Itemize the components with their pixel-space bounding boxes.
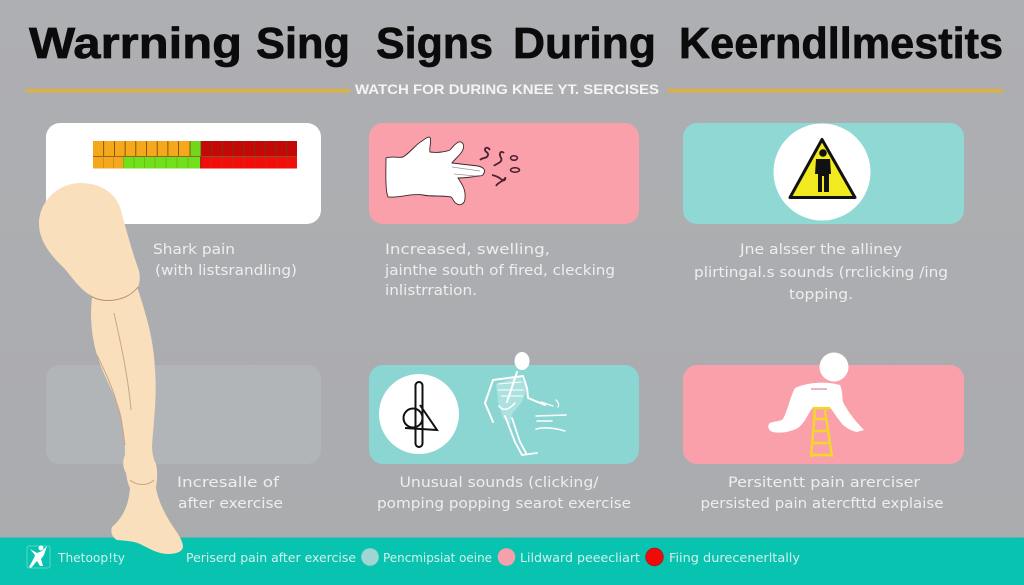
title: Sing — [256, 19, 350, 68]
panel: swelling — [369, 123, 639, 299]
text: swelling: inlistrration. — [385, 283, 477, 299]
icon: stool — [811, 407, 832, 457]
legend labels — [57, 550, 801, 565]
text: warning sign: topping. — [789, 287, 853, 303]
panel: sharp pain — [46, 123, 321, 279]
text: persistent pain: persisted pain atercfttd explaise — [700, 496, 944, 512]
panel: warning sign — [683, 123, 964, 303]
text: sharp pain — [153, 242, 297, 279]
icon: tuning symbol — [379, 374, 459, 454]
icon: person on stool — [768, 352, 864, 433]
text: warning sign — [694, 242, 948, 303]
title: Keerndllmestits — [679, 19, 1003, 68]
footer band — [0, 538, 1024, 585]
legend labels: Thetoop!ty — [57, 550, 126, 565]
text: sharp pain: Shark pain — [153, 242, 235, 258]
title: Warrning — [29, 19, 242, 68]
subtitle with rules: WATCH FOR DURING KNEE YT. SERCISES — [355, 81, 659, 97]
text: increase after exercise — [177, 475, 283, 512]
icon: warning triangle — [774, 124, 870, 220]
icon: swollen hand — [386, 137, 520, 205]
text: swelling: Increased, swelling, — [385, 242, 550, 258]
text: sharp pain: (with listsrandling) — [155, 263, 297, 279]
subtitle with rules — [26, 81, 1003, 97]
legend labels: Fiing durecenerltally — [669, 550, 801, 565]
text: swelling: jainthe south of fired, clecking — [384, 263, 615, 279]
pain scale gauge — [93, 141, 297, 168]
text: persistent pain — [700, 475, 944, 512]
text: persistent pain: Persitentt pain arerciser — [728, 475, 920, 491]
panel: persistent pain — [683, 352, 964, 512]
text: unusual sounds — [377, 475, 631, 512]
panel: swelling after exercise — [46, 365, 321, 512]
panel: unusual sounds — [369, 352, 639, 512]
text: increase after exercise: Incresalle of — [177, 475, 280, 491]
title: During — [513, 19, 656, 68]
illustration: leg — [39, 183, 183, 554]
legend dots — [361, 548, 663, 566]
title: Signs — [376, 19, 493, 68]
title — [29, 19, 1003, 68]
text: unusual sounds: Unusual sounds (clicking/ — [400, 475, 599, 491]
legend labels: Pencmipsiat oeine — [383, 550, 492, 565]
icon: therapy figure — [27, 546, 50, 568]
legend labels: Periserd pain after exercise — [186, 550, 356, 565]
legend labels: Lildward peeecliart — [520, 550, 640, 565]
text: warning sign: Jne alsser the alliney — [739, 242, 902, 258]
text: warning sign: plirtingal.s sounds (rrclicking /ing — [694, 265, 948, 281]
text: increase after exercise: after exercise — [178, 496, 283, 512]
text: swelling — [384, 242, 615, 299]
icon: running skeleton — [485, 352, 566, 455]
text: unusual sounds: pomping popping searot exercise — [377, 496, 631, 512]
